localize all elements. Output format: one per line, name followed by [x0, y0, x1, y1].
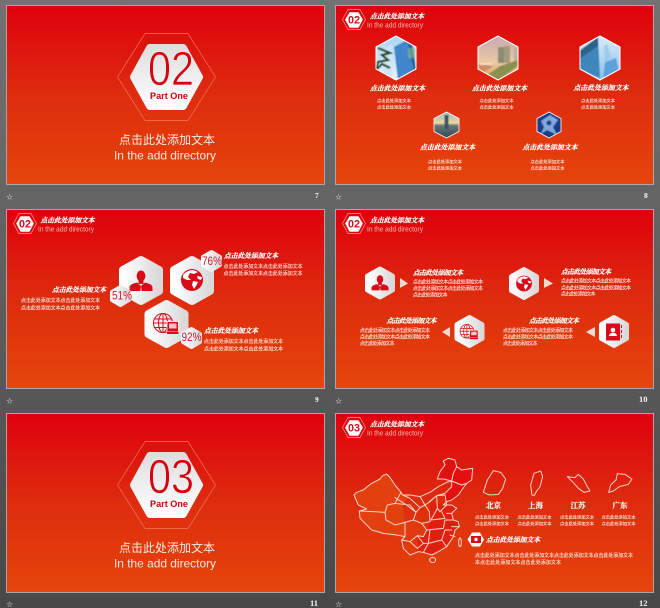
slide 10 number: 10: [639, 394, 648, 404]
Jiangsu outline: [567, 474, 590, 492]
text block 2: 点击此处添加文本点击此处添加文本: [561, 278, 631, 284]
text block 3: 点击此处添加文本: [386, 317, 438, 325]
text block 4: 点击此处添加文本: [503, 340, 538, 347]
caption 5: [522, 144, 579, 172]
text block right bottom: 点击此处添加文本: [204, 327, 259, 335]
text block 1: 点击此处添加文本: [413, 269, 464, 277]
caption 3: 点击此处添加文本: [574, 84, 630, 92]
slide 7 number: 7: [315, 191, 319, 200]
part label: Part One: [150, 499, 188, 509]
photo hexagon 5: [536, 112, 562, 138]
Jiangsu label: 江苏: [570, 500, 587, 510]
text block right top: [224, 252, 303, 277]
caption 3: 点击此处添加文本: [581, 104, 616, 110]
panel: slide 11 section cover: [6, 414, 324, 592]
inner white hexagon badge: [134, 48, 199, 106]
header title: 点击此处添加文本: [370, 420, 425, 428]
caption 5: 点击此处添加文本: [530, 158, 565, 165]
text block 4: 点击此处添加文本点击此处添加文本: [503, 334, 573, 340]
text block left: 点击此处添加文本: [52, 286, 107, 294]
text block right bottom: 点击此处添加文本点击此处添加文本: [204, 338, 283, 345]
text block 1: [413, 269, 483, 298]
Shanghai label: 上海: [528, 500, 543, 510]
summary text: [475, 552, 633, 566]
caption 1: [370, 84, 426, 110]
Guangdong label: 广东: [612, 500, 628, 510]
slide 12 number: 12: [639, 598, 648, 608]
header subtitle: In the add directory: [38, 226, 94, 234]
text block left: 点击此处添加文本点击此处添加文本: [21, 297, 100, 304]
person hexagon: [368, 269, 392, 297]
network hexagon with icon: [148, 304, 184, 344]
header subtitle: In the add directory: [367, 430, 423, 438]
caption 2: [472, 84, 528, 110]
slide 8 favorite icon: ☆: [335, 192, 342, 202]
header badge: [342, 418, 366, 438]
text block right top: 点击此处添加文本: [224, 252, 279, 260]
Beijing label: 点击此处添加文本: [475, 520, 510, 527]
header title: 点击此处添加文本: [370, 12, 425, 20]
arrow left 1: [442, 327, 450, 337]
arrow right 1: [400, 278, 408, 288]
caption 4: 点击此处添加文本: [420, 144, 476, 152]
chinese heading: 点击此处添加文本: [119, 132, 215, 147]
english subheading: In the add directory: [114, 148, 216, 162]
caption 5: 点击此处添加文本: [530, 164, 565, 172]
76 percent badge: 76%: [202, 256, 222, 268]
header subtitle: In the add directory: [367, 22, 423, 30]
chinese heading: 点击此处添加文本: [119, 540, 215, 555]
Beijing outline: [483, 471, 506, 495]
section number: 03: [148, 451, 194, 504]
Shanghai label: [518, 500, 552, 527]
51 percent badge: 51%: [112, 290, 132, 302]
slide 7 favorite icon: ☆: [6, 192, 13, 202]
text block 1: 点击此处添加文本点击此处添加文本: [413, 285, 483, 292]
summary text: 点击此处添加文本点击此处添加文本点击此处添加文本点击此处添加文本: [475, 552, 633, 559]
part label: Part One: [150, 91, 188, 101]
text block 4: 点击此处添加文本点击此处添加文本: [503, 327, 573, 334]
slide 8 number: 8: [644, 191, 648, 200]
text block 1: 点击此处添加文本点击此处添加文本: [413, 278, 483, 286]
summary title: 点击此处添加文本: [486, 536, 541, 544]
header title: 点击此处添加文本: [40, 216, 96, 224]
header badge: 03: [348, 422, 360, 434]
text block 1: 点击此处添加文本: [413, 292, 448, 298]
text block 3: [360, 317, 438, 347]
Jiangsu label: 点击此处添加文本: [560, 520, 595, 527]
text block left: 点击此处添加文本点击此处添加文本: [21, 304, 100, 312]
inner white hexagon badge: [134, 456, 199, 514]
caption 4: 点击此处添加文本: [428, 164, 463, 172]
text block right top: 点击此处添加文本点击此处添加文本: [224, 270, 303, 277]
contact book hexagon: [602, 318, 626, 346]
arrow right 2: [544, 278, 553, 288]
summary text: 本点击此处添加文本点击此处添加文本: [475, 559, 561, 566]
header badge: 02: [19, 218, 31, 230]
globe hexagon with icon: [174, 260, 210, 301]
panel: slide 9 percentage hexagons: [6, 210, 324, 388]
caption 2: 点击此处添加文本: [480, 104, 514, 110]
caption 4: [420, 144, 476, 172]
Jiangsu label: [560, 500, 595, 527]
text block 3: 点击此处添加文本: [360, 340, 395, 347]
Beijing label: 点击此处添加文本: [475, 514, 510, 520]
caption 1: 点击此处添加文本: [370, 84, 426, 92]
photo hexagon 2: [478, 36, 518, 80]
panel: slide 7 section cover: [6, 6, 324, 184]
caption 2: 点击此处添加文本: [480, 97, 514, 104]
text block 2: [561, 268, 631, 298]
76 percent badge: [202, 252, 222, 270]
slide 9 favorite icon: ☆: [6, 396, 13, 406]
network hexagon: [457, 318, 482, 346]
Guangdong outline: [609, 474, 632, 492]
Guangdong label: [602, 500, 636, 527]
globe hexagon: [512, 270, 536, 298]
photo hexagon 4: [434, 112, 460, 138]
person hexagon with icon: [123, 260, 159, 301]
panel: slide 12 China map: [336, 414, 654, 592]
map of China: [354, 458, 473, 563]
text block right bottom: 点击此处添加文本点击此处添加文本: [204, 346, 283, 352]
header badge: 02: [348, 218, 360, 230]
header badge: [14, 214, 36, 234]
photo hexagon 3: [580, 36, 620, 80]
text block 4: 点击此处添加文本: [529, 317, 580, 325]
caption 1: 点击此处添加文本: [377, 97, 412, 104]
Beijing label: 北京: [486, 500, 501, 510]
caption 3: [574, 84, 630, 110]
text block 4: [503, 317, 580, 347]
text block right top: 点击此处添加文本点击此处添加文本: [224, 263, 303, 270]
text block 2: 点击此处添加文本点击此处添加文本: [561, 284, 631, 292]
Beijing label: [475, 500, 510, 527]
english subheading: In the add directory: [114, 556, 216, 570]
photo hexagon 1: [376, 36, 416, 80]
Guangdong label: 点击此处添加文本: [602, 514, 636, 520]
header title: 点击此处添加文本: [370, 216, 425, 224]
arrow left 2: [586, 327, 595, 337]
Shanghai label: 点击此处添加文本: [518, 514, 552, 520]
92 percent badge: 92%: [182, 332, 202, 344]
caption 1: 点击此处添加文本: [377, 104, 412, 110]
Shanghai label: 点击此处添加文本: [518, 520, 552, 527]
92 percent badge: [182, 329, 202, 347]
panel: slide 10 icon process: [336, 210, 654, 388]
text block 3: 点击此处添加文本点击此处添加文本: [360, 334, 430, 340]
panel: slide 8 image hexagons: [336, 6, 654, 184]
text block 2: 点击此处添加文本: [561, 268, 612, 276]
caption 2: 点击此处添加文本: [472, 84, 528, 92]
caption 5: 点击此处添加文本: [522, 144, 579, 152]
header badge: 02: [348, 14, 360, 26]
Guangdong label: 点击此处添加文本: [602, 520, 636, 527]
slide 10 favorite icon: ☆: [335, 396, 342, 406]
text block 2: 点击此处添加文本: [561, 290, 596, 298]
51 percent badge: [112, 287, 132, 305]
caption 3: 点击此处添加文本: [581, 97, 616, 104]
header badge: [342, 214, 366, 234]
camera hexagon icon: [468, 532, 484, 546]
slide 9 number: 9: [315, 395, 319, 404]
outer hexagon outline: [118, 34, 216, 120]
text block right bottom: [204, 327, 283, 352]
section number: 02: [148, 43, 194, 96]
text block left: [21, 286, 107, 312]
header subtitle: In the add directory: [367, 226, 423, 234]
outer hexagon outline: [118, 442, 216, 528]
slide 11 number: 11: [310, 598, 318, 608]
Shanghai outline: [531, 471, 543, 496]
text block 3: 点击此处添加文本点击此处添加文本: [360, 327, 430, 334]
caption 4: 点击此处添加文本: [428, 158, 463, 165]
Jiangsu label: 点击此处添加文本: [560, 514, 595, 520]
header badge: [342, 10, 366, 30]
